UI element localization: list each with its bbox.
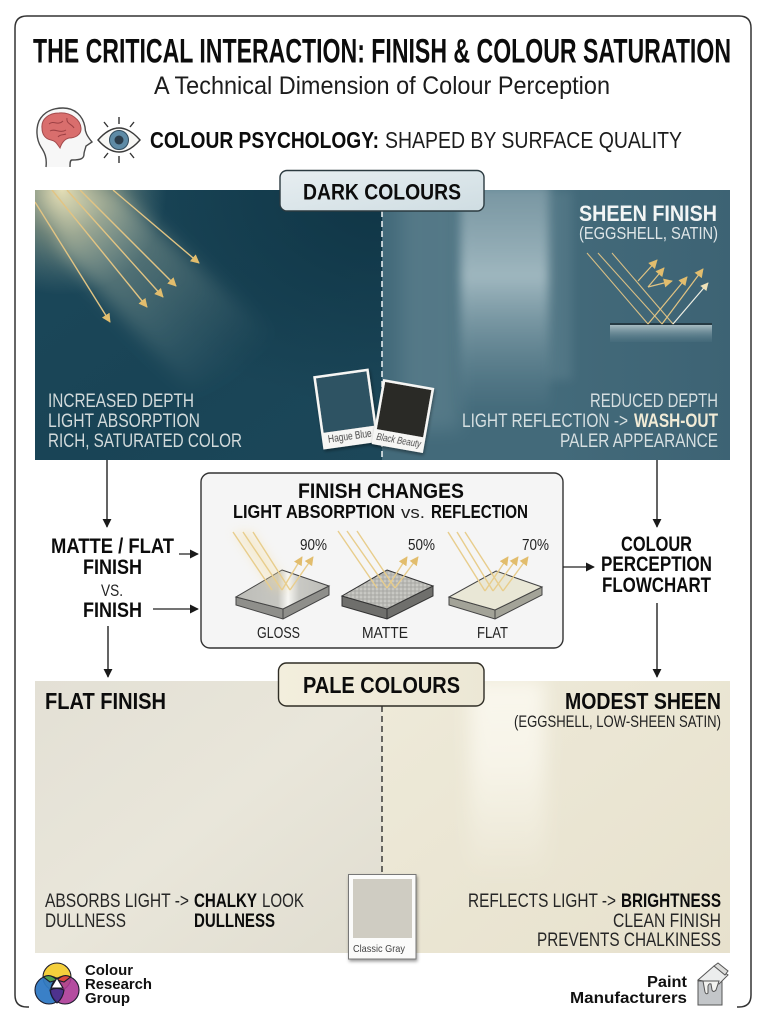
text: flat finish properties: CHALKY: [194, 891, 257, 912]
label: colour perception flowchart: FLOWCHART: [602, 574, 711, 597]
tag: dark colours: [280, 170, 484, 211]
text: dark matte properties: INCREASED DEPTH: [48, 391, 194, 412]
arrow: box to flowchart: [563, 566, 594, 568]
divider: pale panel: [381, 706, 383, 875]
logo: paint manufacturers: [570, 963, 728, 1007]
panel: dark colours matte: [35, 190, 382, 460]
swatch: Black Beauty: [372, 379, 434, 453]
swatch: Hague Blue: Hague Blue: [327, 428, 373, 446]
label: matte flat vs finish: [51, 535, 174, 622]
text: flat finish properties: LOOK: [262, 891, 304, 912]
finish sample: flat: 70%: [522, 537, 549, 554]
panel: pale colours flat: [35, 681, 382, 953]
panel: pale colours modest sheen: [382, 680, 730, 953]
arrow: finish to box: [153, 608, 198, 610]
panel: finish changes: [201, 473, 563, 648]
label: matte flat vs finish: VS.: [101, 581, 123, 600]
label: matte flat vs finish: MATTE / FLAT: [51, 535, 174, 558]
text: flat finish properties: [45, 891, 304, 932]
heading: modest sheen: MODEST SHEEN: [565, 688, 721, 714]
label: colour perception flowchart: PERCEPTION: [601, 553, 712, 576]
arrow: flowchart to modest sheen: [656, 603, 658, 677]
section heading: colour psychology: SHAPED BY SURFACE QUALITY: [385, 127, 682, 153]
text: dark matte properties: LIGHT ABSORPTION: [48, 411, 200, 432]
text: dark sheen properties: LIGHT REFLECTION ->: [462, 411, 628, 432]
logo: colour research group: [35, 963, 152, 1007]
heading: modest sheen: [514, 688, 721, 731]
panel heading: REFLECTION: [431, 501, 528, 522]
panel heading: FINISH CHANGES: [298, 480, 464, 503]
finish sample: gloss: GLOSS: [257, 625, 300, 642]
arrow: matte flat to box: [179, 553, 198, 555]
finish sample: flat: [448, 532, 549, 642]
text: dark matte properties: [48, 391, 242, 452]
icon: eye: [98, 117, 140, 163]
swatch: Classic Gray: Classic Gray: [353, 943, 406, 955]
swatch: Black Beauty: Black Beauty: [375, 431, 422, 451]
finish sample: flat: FLAT: [477, 625, 508, 642]
panel heading: LIGHT ABSORPTION: [233, 501, 395, 522]
text: modest sheen properties: BRIGHTNESS: [621, 891, 721, 912]
text: modest sheen properties: CLEAN FINISH: [613, 911, 721, 932]
dark sheen heading: SHEEN FINISH: [579, 201, 717, 226]
panel heading: vs.: [401, 503, 425, 522]
logo mark: venn circles: [35, 963, 79, 1004]
text: flat finish properties: DULLNESS: [45, 911, 126, 932]
light rays: [35, 190, 199, 322]
text: dark sheen properties: PALER APPEARANCE: [560, 431, 718, 452]
tag: dark colours: DARK COLOURS: [303, 180, 461, 204]
label: matte flat vs finish: FINISH: [83, 599, 142, 622]
text: dark sheen properties: REDUCED DEPTH: [590, 391, 718, 412]
panel heading: [233, 480, 528, 522]
finish sample: gloss: 90%: [300, 537, 327, 554]
arrow: finish to flat panel: [107, 626, 109, 677]
subtitle: A Technical Dimension of Colour Perception: [154, 72, 610, 100]
icon: paint can: [698, 963, 728, 1005]
label: colour perception flowchart: [601, 533, 712, 597]
finish sample: matte: 50%: [408, 537, 435, 554]
swatch: Classic Gray: [348, 874, 416, 959]
finish sample: gloss: [233, 532, 329, 642]
logo: colour research group: Group: [85, 991, 130, 1007]
finish sample: matte: MATTE: [362, 625, 408, 642]
logo: colour research group: Colour: [85, 963, 133, 979]
section heading: colour psychology: [150, 127, 682, 153]
flow arrow: dark sheen to flowchart: [656, 460, 658, 527]
text: dark sheen properties: WASH-OUT: [634, 411, 718, 432]
swatch: Hague Blue: [313, 368, 379, 450]
label: matte flat vs finish: FINISH: [83, 556, 142, 579]
logo: paint manufacturers: Paint: [647, 974, 688, 991]
icon: head with brain: [37, 108, 92, 167]
logo: paint manufacturers: Manufacturers: [570, 990, 687, 1007]
dark sheen heading: [579, 201, 718, 243]
text: flat finish properties: ABSORBS LIGHT ->: [45, 891, 189, 912]
dark sheen heading: (EGGSHELL, SATIN): [579, 223, 718, 243]
text: modest sheen properties: PREVENTS CHALKINESS: [537, 930, 721, 951]
flow arrow: dark matte to finish: [106, 460, 108, 527]
tag: pale colours: PALE COLOURS: [303, 672, 460, 698]
heading: flat finish: FLAT FINISH: [45, 688, 166, 714]
tag: pale colours: [278, 663, 484, 706]
text: flat finish properties: DULLNESS: [194, 911, 275, 932]
text: dark matte properties: RICH, SATURATED COLOR: [48, 431, 242, 452]
logo: colour research group: Research: [85, 977, 152, 993]
text: modest sheen properties: [468, 891, 721, 951]
reflection diagram: [587, 253, 712, 342]
section heading: colour psychology: COLOUR PSYCHOLOGY:: [150, 127, 379, 153]
label: colour perception flowchart: COLOUR: [621, 533, 692, 556]
text: modest sheen properties: REFLECTS LIGHT ->: [468, 891, 616, 912]
text: dark sheen properties: [462, 391, 718, 452]
finish sample: matte: [338, 531, 435, 642]
divider: dark panel: [381, 211, 383, 460]
panel: dark colours sheen: [382, 185, 730, 460]
